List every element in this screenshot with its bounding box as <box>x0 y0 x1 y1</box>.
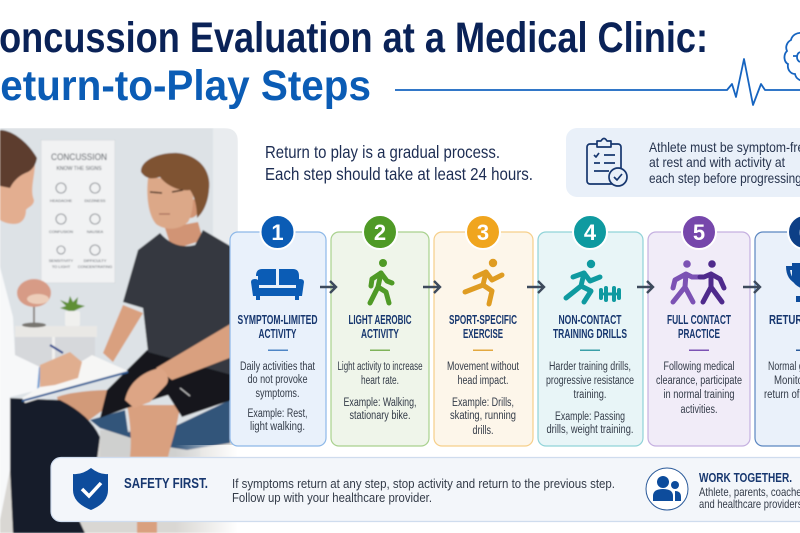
title <box>0 14 708 110</box>
step 2 card: ACTIVITY <box>361 327 399 341</box>
panel: safety banner: SAFETY FIRST. <box>124 475 208 492</box>
heartbeat line <box>395 59 800 105</box>
doctor <box>0 130 128 533</box>
poster: concussion signs <box>41 140 115 283</box>
poster: concussion signs: CONCUSSION <box>51 152 107 163</box>
badge 2 <box>363 215 397 249</box>
intro text: Return to play is a gradual process. <box>265 142 500 162</box>
badge 1 <box>260 215 294 249</box>
step 1 card: light walking. <box>250 421 305 433</box>
step 3 card: SPORT-SPECIFIC <box>449 313 517 327</box>
side table <box>16 326 96 366</box>
step 3 card: EXERCISE <box>463 327 503 341</box>
step 3 card: skating, running <box>450 410 516 422</box>
icon: two people in contact <box>673 260 724 302</box>
step 4 card: training. <box>574 389 606 401</box>
step 2 card: heart rate. <box>361 375 399 387</box>
photo: clinic scene <box>0 128 238 533</box>
step 1 card: do not provoke <box>248 374 308 386</box>
poster: concussion signs: DIFFICULTY <box>84 258 107 263</box>
badge 5: 5 <box>693 220 705 245</box>
step 1 card: Example: Rest, <box>248 408 308 420</box>
arrow 5 <box>743 281 760 293</box>
step 2 card: LIGHT AEROBIC <box>348 313 412 327</box>
safety message <box>232 477 615 505</box>
step 4 card: Harder training drills, <box>549 361 631 373</box>
step 1 card: ACTIVITY <box>258 327 297 341</box>
poster: concussion signs: SENSITIVITY <box>49 258 74 263</box>
badge 1: 1 <box>271 220 284 245</box>
step 3 card: head impact. <box>458 375 508 387</box>
icon: sofa <box>251 269 304 300</box>
poster: concussion signs: HEADACHE <box>50 198 72 203</box>
step 1 card <box>230 215 326 446</box>
badge 6 <box>788 215 800 249</box>
badge 3: 3 <box>477 220 489 245</box>
step 5 card: in normal training <box>664 389 734 401</box>
icon: trophy <box>786 263 800 302</box>
badge 5 <box>682 215 716 249</box>
arrow 2 <box>423 281 440 293</box>
step 4 card: TRAINING DRILLS <box>553 327 627 341</box>
intro text: Each step should take at least 24 hours. <box>265 164 533 184</box>
step 2 card: Light activity to increase <box>338 361 422 373</box>
step 3 card: Example: Drills, <box>452 397 514 409</box>
intro text <box>265 142 533 184</box>
bench <box>90 400 230 457</box>
step 5 card: clearance, participate <box>656 375 742 387</box>
icon: runner with dumbbell <box>566 260 619 302</box>
badge 4 <box>573 215 607 249</box>
step 3 card <box>434 215 533 446</box>
poster: concussion signs: TO LIGHT <box>52 264 71 269</box>
arrow 3 <box>527 281 544 293</box>
safety message: If symptoms return at any step, stop activity and return to the previous step. <box>232 477 615 491</box>
badge 3 <box>466 215 500 249</box>
step 1 card: Daily activities that <box>240 361 316 373</box>
step 5 card: PRACTICE <box>678 327 720 341</box>
panel: safety banner <box>51 458 800 522</box>
plant <box>60 296 85 326</box>
step 1 card: symptoms. <box>256 388 300 400</box>
step 6 card <box>755 215 800 446</box>
step 1 card: SYMPTOM-LIMITED <box>238 313 318 327</box>
step 5 card: activities. <box>680 404 718 416</box>
icon: running person <box>465 259 502 304</box>
icon: brain outline <box>784 33 800 81</box>
badge 4: 4 <box>584 220 597 245</box>
step 3 card: drills. <box>472 425 494 437</box>
brain model <box>17 279 51 328</box>
athlete <box>57 153 232 533</box>
arrow 4 <box>637 281 653 293</box>
icon: team <box>646 468 688 510</box>
step 4 card <box>538 215 643 446</box>
poster: concussion signs: CONCENTRATING <box>78 264 112 269</box>
icon: walking person <box>370 259 392 303</box>
safety message: Follow up with your healthcare provider. <box>232 491 432 505</box>
step 5 card: Following medical <box>664 361 734 373</box>
callout text <box>649 139 800 186</box>
step 5 card <box>648 215 750 446</box>
icon: shield <box>73 468 108 510</box>
icon: clipboard check <box>587 138 627 186</box>
panel: symptom-free callout <box>566 128 800 197</box>
step 4 card: progressive resistance <box>546 375 634 387</box>
work together text <box>699 470 800 511</box>
poster: concussion signs: KNOW THE SIGNS <box>56 166 102 172</box>
step 5 card: FULL CONTACT <box>667 313 731 327</box>
step 2 card <box>331 215 429 446</box>
step 4 card: drills, weight training. <box>546 424 634 436</box>
arrow 1 <box>320 281 336 293</box>
step 2 card: stationary bike. <box>350 410 410 422</box>
step 4 card: Example: Passing <box>555 411 625 423</box>
poster: concussion signs: NAUSEA <box>87 229 104 234</box>
poster: concussion signs: DIZZINESS <box>85 198 106 203</box>
step 3 card: Movement without <box>447 361 520 373</box>
step 4 card: NON-CONTACT <box>558 313 622 327</box>
badge 2: 2 <box>374 220 386 245</box>
step 2 card: Example: Walking, <box>344 397 416 409</box>
poster: concussion signs: CONFUSION <box>49 229 73 234</box>
